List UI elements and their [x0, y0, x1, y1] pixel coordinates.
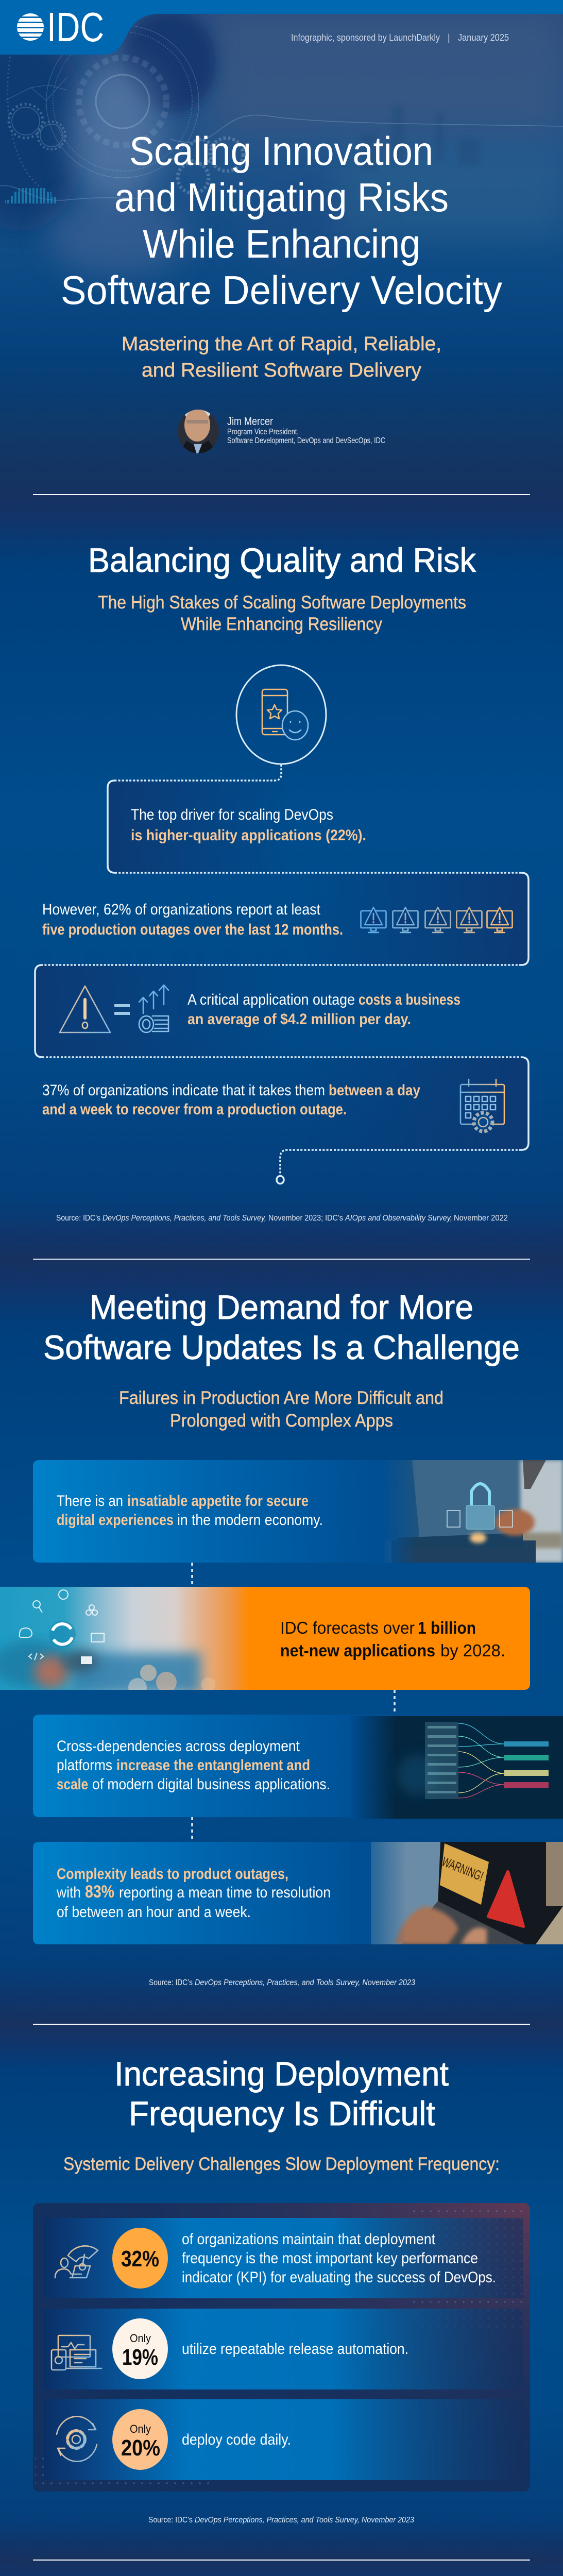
- text: complexity: Complexity leads to product outages,: [57, 1866, 288, 1883]
- subheading: systemic delivery challenges: Systemic Delivery Challenges Slow Deployment Frequency:: [63, 2154, 500, 2174]
- main subtitle: Mastering the Art of Rapid, Reliable,: [122, 333, 441, 355]
- source note: AIOps and Observability Survey,: [345, 1214, 452, 1223]
- text: cross-dependencies: increase the entanglement and: [116, 1757, 310, 1774]
- source note: DevOps Perceptions, Practices, and Tools Survey,: [103, 1214, 266, 1223]
- row: 32 percent: [44, 2218, 523, 2298]
- text: one billion forecast: IDC forecasts over: [280, 1618, 415, 1637]
- source note: November 2022: [454, 1214, 508, 1223]
- text: complexity: [56, 1866, 331, 1921]
- main subtitle: and Resilient Software Delivery: [142, 360, 421, 381]
- text: recovery time: [42, 1082, 420, 1118]
- IDC logo: IDC: [47, 4, 104, 50]
- text: top driver: [131, 806, 366, 844]
- source note: November 2023; IDC’s: [268, 1214, 343, 1223]
- row: 19 percent: utilize repeatable release automation.: [182, 2341, 408, 2358]
- report tag line: |: [448, 32, 450, 43]
- text: outage cost: costs a business: [359, 991, 460, 1008]
- shaded backgrounds of text boxes: [35, 781, 528, 1150]
- heading: increasing deployment frequency: [114, 2055, 449, 2132]
- row: 19 percent: 19%: [122, 2345, 158, 2370]
- author name and title: Software Development, DevOps and DevSecOps, IDC: [227, 436, 385, 445]
- text: production outages: five production outages over the last 12 months.: [42, 921, 343, 938]
- section 2: meeting demand: [0, 1288, 563, 1987]
- source note: Source: IDC’s: [56, 1214, 100, 1223]
- icons: five warning monitors: [361, 907, 512, 933]
- row: 32 percent: frequency is the most important key performance: [182, 2250, 478, 2267]
- source note: [56, 1214, 508, 1223]
- card: appetite for secure experiences: [33, 1460, 563, 1563]
- card: one billion applications forecast: [0, 1587, 530, 1697]
- photo: laptop warning: [350, 1842, 563, 1944]
- card: complexity and outages: [33, 1842, 563, 1944]
- main title: [61, 128, 502, 313]
- section 1: balancing quality and risk: [35, 541, 528, 1223]
- subheading: high stakes: The High Stakes of Scaling Software Deployments: [98, 592, 466, 613]
- text: one billion forecast: [280, 1618, 505, 1660]
- top bar and logo tab: [0, 0, 563, 55]
- icon: gear in cycle: [57, 2416, 97, 2462]
- row: 20 percent: Only: [130, 2422, 151, 2435]
- main title: While Enhancing: [143, 221, 420, 266]
- text: insatiable appetite: [57, 1493, 323, 1529]
- dotted connector path: [35, 765, 528, 1184]
- text: insatiable appetite: digital experiences: [57, 1512, 174, 1529]
- subheading: failures in production: Failures in Production Are More Difficult and: [119, 1388, 443, 1408]
- hero background with hand and city photo: [0, 0, 563, 502]
- subheading: failures in production: [119, 1388, 443, 1431]
- source note: Source: IDC’s: [148, 2516, 193, 2524]
- text: complexity: with: [56, 1884, 81, 1901]
- icon: devices: [52, 2335, 101, 2370]
- photo: laptop with padlock: [381, 1460, 563, 1563]
- connectors between cards: [192, 1563, 395, 1842]
- heading: increasing deployment frequency: Increasing Deployment: [114, 2055, 449, 2093]
- text: recovery time: between a day: [329, 1082, 420, 1099]
- icon: gauge and person with laptop: [55, 2246, 98, 2278]
- report tag line: Infographic, sponsored by LaunchDarkly: [291, 32, 440, 43]
- subheading: failures in production: Prolonged with Complex Apps: [170, 1411, 393, 1431]
- text: production outages: However, 62% of organizations report at least: [42, 901, 321, 918]
- main title: and Mitigating Risks: [114, 175, 449, 220]
- photo: laptop warning: WARNING!: [440, 1854, 486, 1884]
- heading: balancing quality and risk: Balancing Quality and Risk: [88, 541, 476, 579]
- row: 19 percent: [44, 2309, 523, 2389]
- text: outage cost: an average of $4.2 million per day.: [187, 1011, 411, 1028]
- icon circle: phone with star and smile: [236, 665, 326, 764]
- text: one billion forecast: by 2028.: [440, 1641, 505, 1660]
- row: 20 percent: 20%: [121, 2435, 160, 2461]
- row: 20 percent: deploy code daily.: [182, 2431, 291, 2448]
- row: 32 percent: of organizations maintain that deployment: [182, 2231, 436, 2248]
- heading: meeting demand: Meeting Demand for More: [90, 1288, 473, 1326]
- subheading: high stakes: While Enhancing Resiliency: [181, 614, 382, 634]
- text: recovery time: and a week to recover from a production outage.: [42, 1101, 347, 1118]
- row: 19 percent: Only: [130, 2332, 151, 2345]
- heading: increasing deployment frequency: Frequency Is Difficult: [129, 2094, 435, 2132]
- text: complexity: reporting a mean time to resolution: [119, 1884, 331, 1901]
- report tag line: January 2025: [458, 32, 509, 43]
- main title: Software Delivery Velocity: [61, 267, 502, 313]
- text: cross-dependencies: of modern digital business applications.: [92, 1776, 330, 1793]
- subheading: high stakes: [98, 592, 466, 634]
- icon: warning equals money: [60, 985, 168, 1032]
- author name and title: Program Vice President,: [227, 428, 299, 436]
- source note: DevOps Perceptions, Practices, and Tools Survey, November 2023: [195, 2516, 414, 2524]
- photo: hand with technology icons: [0, 1590, 215, 1697]
- main title: Scaling Innovation: [129, 128, 433, 174]
- text: top driver: The top driver for scaling DevOps: [131, 806, 333, 823]
- author name and title: Jim Mercer: [227, 415, 273, 428]
- text: complexity: of between an hour and a week.: [57, 1904, 251, 1921]
- text: complexity: 83%: [85, 1882, 114, 1902]
- photo: data streams: [350, 1716, 563, 1819]
- text: one billion forecast: 1 billion: [418, 1618, 476, 1637]
- heading: meeting demand: [43, 1288, 520, 1366]
- text: insatiable appetite: insatiable appetite for secure: [127, 1493, 309, 1510]
- text: recovery time: 37% of organizations indicate that it takes them: [42, 1082, 325, 1099]
- author name and title: [227, 415, 385, 445]
- icon: calendar with gear: [460, 1079, 504, 1131]
- source note: DevOps Perceptions, Practices, and Tools Survey, November 2023: [195, 1978, 415, 1987]
- row: 32 percent: 32%: [121, 2246, 159, 2272]
- text: outage cost: [187, 991, 460, 1028]
- row: 20 percent: [44, 2399, 523, 2480]
- hero line art of gears and network: [0, 25, 563, 200]
- text: one billion forecast: net-new applications: [280, 1641, 435, 1660]
- text: production outages: [42, 901, 343, 938]
- heading: meeting demand: Software Updates Is a Challenge: [43, 1328, 520, 1366]
- author portrait: [178, 410, 219, 453]
- text: cross-dependencies: [57, 1738, 330, 1793]
- row: 32 percent: indicator (KPI) for evaluating the success of DevOps.: [182, 2269, 496, 2286]
- IDC logo: [17, 12, 103, 42]
- main subtitle: [122, 333, 441, 381]
- card: cross-dependencies: [33, 1715, 563, 1819]
- source note: Source: IDC’s: [149, 1978, 193, 1987]
- text: insatiable appetite: in the modern economy.: [177, 1512, 323, 1529]
- text: outage cost: A critical application outage: [187, 991, 355, 1008]
- text: cross-dependencies: platforms: [57, 1757, 112, 1774]
- section 3: deployment frequency: [33, 2055, 530, 2524]
- text: insatiable appetite: There is an: [57, 1493, 123, 1510]
- statistics panel: [33, 2203, 530, 2492]
- text: top driver: is higher-quality applications (22%).: [131, 827, 366, 844]
- text: cross-dependencies: Cross-dependencies across deployment: [57, 1738, 300, 1755]
- text: cross-dependencies: scale: [57, 1776, 88, 1793]
